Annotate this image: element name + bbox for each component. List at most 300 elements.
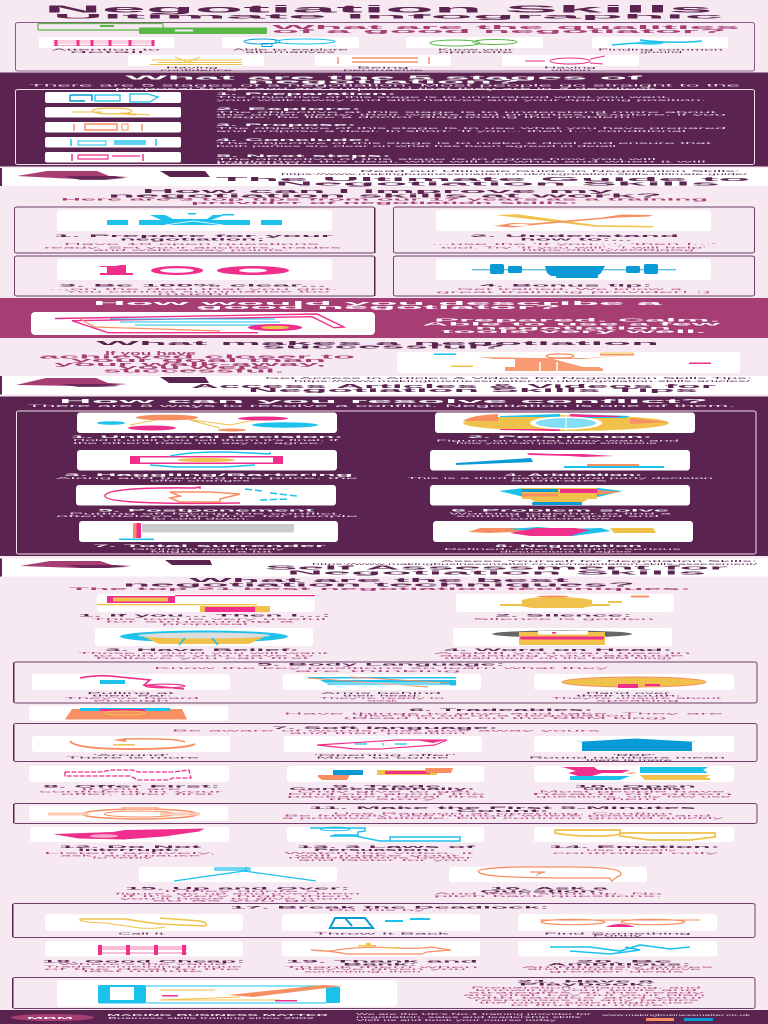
technique 13: 3 laws of persuasion: and faster for you bbox=[298, 858, 468, 862]
quality card 4: Finding common bbox=[598, 48, 723, 51]
technique 16: ask a question bbox=[434, 867, 662, 897]
text: success definition: you were bbox=[118, 365, 270, 370]
body language: arms: speak bbox=[367, 699, 398, 702]
way 1: unilateral decision bbox=[71, 412, 343, 445]
stage text 4: conclude: both parties are clear on what has been agreed in detail bbox=[216, 144, 616, 148]
quality card 4 bbox=[592, 37, 728, 54]
technique 3: have belief: Those around you will want bbox=[78, 651, 329, 655]
stage text 1: preparation: 1. Preparation: bbox=[216, 92, 396, 96]
panel: tip 3 be clear: You cannot summarise too bbox=[64, 290, 330, 293]
footer website and buttons bbox=[601, 1014, 750, 1021]
technique 9: trade concessionally: Concessionally: bbox=[289, 787, 475, 791]
technique 6: tradeables: like the oil of a negotiation bbox=[358, 714, 632, 717]
technique 2: silence: Silence is golden bbox=[473, 617, 654, 621]
panel: tip 3 be clear: much! bbox=[157, 292, 230, 296]
stage text 2: explore: 2. Explore: bbox=[216, 107, 361, 111]
stage text 5: next steps bbox=[216, 154, 706, 165]
stage text 5: next steps: happen. bbox=[216, 161, 306, 165]
banner: articles and videos bbox=[0, 376, 768, 394]
technique 10: open concessions bbox=[532, 766, 734, 801]
technique 13: 3 laws of persuasion: negotiations better bbox=[288, 856, 473, 859]
deadlock: find something funny: Find Something bbox=[544, 932, 691, 935]
body language: mouth bbox=[534, 674, 734, 702]
footer company name: MAKING BUSINESS MATTER bbox=[107, 1013, 328, 1017]
heading: how can I improve: negotiation skills at work? bbox=[108, 192, 662, 199]
technique 20: be ambitious: greater deals bbox=[549, 970, 686, 973]
stage text 2: explore bbox=[216, 107, 727, 119]
technique 12: do not interrupt: Listen actively, bbox=[44, 851, 216, 855]
text: prepared calm: negotiation bbox=[475, 325, 671, 331]
deadlock heading: 17. Break the Deadlock: bbox=[230, 905, 549, 909]
panel: tip 4 bonus: 4. Bonus tip: bbox=[480, 283, 652, 288]
icon: handshake logo bbox=[17, 171, 210, 180]
heading: best negotiation techniques: negotiation techniques? bbox=[123, 581, 635, 588]
technique 6: tradeables: Have things to give and take. They are bbox=[284, 712, 723, 715]
stage text 2: explore: stage, be like a doctor diagnosing the problem. bbox=[216, 115, 636, 119]
technique 13: 3 laws of persuasion bbox=[284, 827, 484, 862]
body language: ear: their ear: bbox=[92, 694, 172, 697]
panel: 21 have a playbook bbox=[12, 978, 755, 1008]
panel: qualities of a good negotiator bbox=[16, 22, 754, 71]
stage text 3: propose: and propose a deal. In short: 'If you... then I...' conditional bbox=[216, 129, 686, 133]
panel: tip 2 understand: ...use the 'If you...', 'then I...' bbox=[431, 242, 717, 246]
way 7: total surrender: 7. Total surrender bbox=[93, 544, 328, 548]
soft language heading bbox=[172, 726, 602, 735]
deadlock: find something funny bbox=[518, 914, 717, 937]
quality card 1: Attention to bbox=[52, 48, 160, 51]
title bbox=[44, 4, 723, 20]
panel: 5 stages of negotiation bbox=[0, 72, 768, 166]
way 8: negotiation bbox=[433, 521, 693, 553]
panel: 5 body language bbox=[13, 662, 757, 703]
technique 18: good cheap: Where's the value bbox=[59, 962, 226, 966]
technique 15: up and over: 15. Up and Over: bbox=[125, 886, 350, 890]
text: success definition: your goal than bbox=[71, 358, 326, 363]
way 1: unilateral decision: 1. Unilateral decision: bbox=[71, 435, 343, 439]
deadlock: call it: Call It bbox=[118, 932, 165, 935]
technique 14: emotion: 14. Emotion: bbox=[549, 845, 720, 849]
soft language heading: and their position bbox=[289, 731, 466, 735]
panel: tip 2 understand bbox=[394, 207, 754, 253]
first 5 minutes text bbox=[282, 806, 724, 820]
body language: mouth: They're unsure about bbox=[551, 696, 722, 700]
heading: how can I improve: provider of negotiation skills: bbox=[191, 201, 578, 205]
panel: tip 1 prepare: and walk-away points. bbox=[93, 248, 289, 252]
soft language: opening offer: 'Opening offer' bbox=[314, 753, 457, 757]
body language heading: 5. Body Language: bbox=[257, 662, 505, 667]
banner text 2: Access Articles & Videos for bbox=[191, 383, 717, 389]
panel: tip 3 be clear: ...on the deal that you got. bbox=[49, 287, 338, 291]
panel: tip 2 understand: tool. Try 'If you will', 'I will help' bbox=[441, 246, 707, 249]
technique 14: emotion: controlled only bbox=[552, 851, 720, 855]
technique 2: silence: 2. Silence: bbox=[495, 613, 632, 618]
technique 9: trade concessionally: Find out about the bbox=[287, 792, 485, 796]
icon: playbook tablet bbox=[98, 985, 343, 1004]
way 1: unilateral decision: the others have no say or agree. bbox=[73, 441, 323, 445]
first 5 minutes text: Be friendly, use humour where possible and bbox=[284, 814, 711, 817]
stage text 3: propose: The objective of this stage is to use what you have prepared bbox=[216, 126, 727, 130]
footer logo: MBM bbox=[27, 1016, 73, 1020]
heading: how can I improve: Here are 3 top tips from our 17 years as a training bbox=[61, 197, 708, 202]
heading: 5 stages: What are the 5 stages of bbox=[125, 75, 644, 81]
banner text 3: Self Assessment for bbox=[265, 564, 729, 571]
technique 18: good cheap: last minute bbox=[83, 969, 203, 973]
way 8: negotiation: discussions to agree bbox=[500, 550, 633, 553]
panel: what makes a negotiation successful: What makes a negotiation bbox=[96, 340, 659, 346]
first 5 minutes text: Count: bbox=[456, 809, 549, 813]
technique 12: do not interrupt: 12. Do Not bbox=[59, 845, 201, 849]
panel: 11 first 5 minutes bbox=[13, 804, 757, 824]
panel: tip 3 be clear bbox=[14, 256, 376, 296]
soft language: around: 'Around' bbox=[93, 753, 170, 757]
stage text 5: next steps: implement the deal, who will do what and when it will bbox=[216, 160, 706, 163]
technique 9: trade concessionally: Only give to get. bbox=[297, 790, 478, 793]
stage text 1: preparation: your walk-away and alternatives and your opening position. bbox=[216, 98, 706, 102]
technique 1: if you then I: This tool is very useful bbox=[91, 617, 326, 621]
stage text 2: explore: The objective at this stage is to understand more about bbox=[216, 110, 718, 114]
playbook text: 21. Have a bbox=[517, 979, 655, 984]
technique 8: offer first: confident in your bbox=[39, 790, 223, 793]
heading: how can I improve: How can I improve my bbox=[142, 188, 615, 194]
body language: mouth: speaking bbox=[596, 699, 679, 702]
soft language heading: Be aware of words that give away yours bbox=[172, 729, 602, 732]
banner text bbox=[216, 170, 750, 187]
technique 19: thank and bank: Bank: bbox=[343, 962, 417, 967]
technique 19: thank and bank: something, then bbox=[304, 970, 421, 973]
technique 9: trade concessionally: the story bbox=[328, 797, 438, 801]
technique 4: word on head: 4. Word on Head: bbox=[444, 648, 672, 652]
technique 19: thank and bank: Thank them when bbox=[284, 965, 478, 969]
way 2: persuasion: Figure out what they want and bbox=[436, 439, 680, 442]
deadlock: throw it back bbox=[282, 914, 480, 935]
body language: arms bbox=[283, 674, 481, 702]
way 5: postponement: to cool down. bbox=[152, 517, 250, 520]
panel: good negotiator: good negotiator? bbox=[196, 304, 561, 310]
title: Ultimate Infographic bbox=[53, 13, 723, 20]
stage text 5: next steps: 5. Next steps: bbox=[216, 154, 391, 158]
technique 10: open concessions: them bbox=[605, 797, 657, 801]
way 3: haggling: 3. Haggling/Bartering bbox=[64, 473, 353, 477]
way 1: unilateral decision: Hold it until you tell them it's final, if bbox=[73, 438, 339, 442]
footer company name bbox=[107, 1013, 328, 1020]
footer description bbox=[356, 1012, 591, 1022]
technique 3: have belief: believe you can first bbox=[96, 656, 311, 660]
stage icon: explore bbox=[45, 107, 181, 118]
technique 3: have belief bbox=[78, 628, 329, 660]
technique 15: up and over: so as you go bbox=[152, 899, 316, 902]
body language: mouth: their mouth: bbox=[576, 694, 681, 697]
panel: tip 2 understand: how to:... bbox=[520, 237, 632, 242]
soft language heading: 7. Soft language: bbox=[272, 726, 498, 730]
footer bbox=[0, 1010, 768, 1024]
technique 15: up and over: If they quote a bbox=[164, 889, 319, 893]
technique 15: up and over: if it's very high, then bbox=[122, 894, 350, 898]
banner text 3: Negotiation Skills bbox=[287, 569, 706, 576]
stage text 4: conclude bbox=[216, 138, 712, 148]
banner: ultimate guide bbox=[0, 168, 768, 187]
technique 13: 3 laws of persuasion: Watch the video, it bbox=[284, 851, 474, 855]
way 3: haggling: offer changes bbox=[150, 479, 250, 482]
technique 20: be ambitious: Ambitious: bbox=[547, 962, 691, 967]
stage icon: conclude bbox=[45, 137, 181, 148]
deadlock: throw it back: Throw It Back bbox=[314, 932, 451, 935]
technique 16: ask a question: pitch back questions. bbox=[434, 894, 662, 897]
quality card 4: ground bbox=[640, 50, 682, 54]
soft language: opening offer: More to come bbox=[316, 756, 449, 759]
body language heading: Know the key positions so learn what they bbox=[154, 666, 610, 670]
technique 13: 3 laws of persuasion: will make your bbox=[292, 854, 460, 857]
text: success definition: successful. bbox=[103, 368, 284, 374]
technique 16: ask a question: And then shut up. No bbox=[434, 892, 662, 895]
banner text: Read our Ultimate Guide to Negotiation Skills: bbox=[360, 170, 740, 173]
panel: 17 break the deadlock bbox=[12, 904, 755, 938]
panel: tip 4 bonus: Get trained. We know a bbox=[457, 287, 682, 291]
technique 19: thank and bank: they've given you bbox=[294, 967, 466, 971]
banner text: Negotiation Skills bbox=[275, 180, 720, 187]
playbook text bbox=[463, 979, 706, 1007]
soft language: around: There is more bbox=[66, 756, 199, 759]
technique 14: emotion bbox=[534, 827, 734, 855]
heading: best negotiation techniques: What are the best bbox=[189, 577, 570, 583]
footer website and buttons: www.makingbusinessmatter.co.uk bbox=[601, 1014, 750, 1017]
technique 1: if you then I bbox=[78, 594, 331, 626]
way 4: arbitration: This is a third party/neutral party decision bbox=[407, 476, 714, 480]
text: prepared calm: Prepared. Calm. bbox=[434, 317, 720, 323]
text: success definition bbox=[39, 351, 355, 374]
technique 10: open concessions: questions, only few use bbox=[536, 795, 731, 798]
stage text 1: preparation bbox=[216, 92, 706, 102]
quality card 5: confidence bbox=[160, 68, 232, 71]
soft language: RRP: Round numbers mean bbox=[529, 756, 725, 759]
technique 10: open concessions: 10. Open bbox=[574, 784, 696, 788]
first 5 minutes text: a positive attitude. Find common ground quickly bbox=[282, 816, 724, 820]
soft language: RRP bbox=[529, 736, 734, 762]
way 7: total surrender: Might feel a lot bbox=[150, 550, 274, 553]
technique 20: be ambitious bbox=[518, 941, 717, 973]
body language: ear: enough bbox=[93, 699, 169, 702]
quality card 2 bbox=[222, 37, 359, 54]
footer logo bbox=[11, 1014, 94, 1021]
technique 15: up and over bbox=[115, 867, 360, 902]
panel: 7 soft language bbox=[13, 724, 757, 762]
banner text 3 bbox=[265, 560, 759, 576]
footer description: We are the UK's No.1 training provider for bbox=[356, 1012, 591, 1016]
technique 15: up and over: figure, go up and over them bbox=[115, 892, 360, 895]
icon: handshake logo 3 bbox=[20, 560, 212, 568]
panel: tip 3 be clear: 3. Be 100% clear... bbox=[59, 283, 326, 288]
technique 10: open concessions: Concessions: bbox=[583, 787, 686, 791]
quality card 6: Being bbox=[357, 66, 409, 69]
way 5: postponement bbox=[56, 485, 359, 520]
banner text 2: Negotiation Skills Tips bbox=[248, 387, 698, 393]
technique 4: word on head: adjusting your attitude bbox=[439, 654, 684, 657]
deadlock: call it bbox=[45, 914, 243, 935]
deadlock heading bbox=[230, 905, 549, 912]
text: success definition: your walk-away, bbox=[54, 362, 326, 367]
text: success definition: If you have bbox=[105, 351, 196, 356]
playbook text: the other side might use bbox=[479, 1001, 694, 1004]
stage icon: next steps bbox=[45, 152, 181, 162]
playbook text: Preparation, Planning, and bbox=[471, 986, 701, 989]
first 5 minutes text: Use Rapport at opening, Confirm bbox=[333, 812, 673, 815]
way 8: negotiation: 8. Negotiation bbox=[495, 544, 642, 548]
quality card 3: Know your bbox=[438, 48, 513, 51]
body language: ear bbox=[32, 674, 230, 702]
technique 15: up and over: you'll have to give more bbox=[120, 897, 353, 900]
quality card 5 bbox=[128, 55, 264, 71]
way 4: arbitration: arbitrates bbox=[510, 479, 607, 482]
panel: tip 1 prepare: negotiation; bbox=[120, 237, 265, 242]
quality card 2: alternatives bbox=[245, 50, 336, 54]
stage text 4: conclude: 4. Conclude: bbox=[216, 138, 371, 142]
banner text 2: https://www.makingbusinessmatter.co.uk/negotiation-skills-articles/ bbox=[294, 380, 752, 383]
way 6: problem solve bbox=[430, 485, 690, 520]
way 4: arbitration: 4. Arbitration: bbox=[505, 473, 642, 477]
panel: what makes a negotiation successful bbox=[39, 340, 740, 374]
playbook text: strategies at the ready bbox=[468, 991, 706, 994]
quality card 7: Having bbox=[544, 66, 596, 69]
body language: arms: They're ready to bbox=[319, 696, 444, 700]
icon: orange clock bbox=[48, 807, 200, 819]
technique 8: offer first bbox=[29, 766, 229, 795]
technique 1: if you then I: for structuring a bbox=[105, 620, 294, 623]
technique 6: tradeables: 6. Tradeables: bbox=[409, 708, 593, 712]
way 2: persuasion: how you can persuade someone bbox=[456, 441, 658, 445]
icon: certificate bbox=[55, 314, 344, 333]
panel: tip 2 understand: 2. Understand bbox=[470, 234, 679, 238]
first 5 minutes text: 11. Make the First 5-Minutes bbox=[309, 806, 696, 810]
technique 18: good cheap: of the deal to the bbox=[44, 967, 240, 971]
technique 9: trade concessionally: 9. Trade bbox=[332, 784, 442, 788]
icon: handshake logo 2 bbox=[16, 377, 209, 387]
technique 8: offer first: offer, offer first bbox=[61, 792, 215, 795]
body language: arms: their head: bbox=[343, 694, 421, 697]
panel: tip 1 prepare: 1. Prepare for your bbox=[54, 234, 334, 238]
icon: green handshake bbox=[38, 24, 267, 34]
way 3: haggling: Along and trading the price, the bbox=[56, 476, 359, 479]
panel: good negotiator: How would you describe a bbox=[93, 300, 665, 306]
playbook text: to find out more. bbox=[510, 1003, 670, 1007]
icon: podium winner bbox=[434, 352, 711, 372]
text: success definition: achieved closer to bbox=[39, 354, 355, 360]
way 2: persuasion: 2. Persuasion: bbox=[468, 435, 652, 439]
quality card 3: opposite bbox=[438, 50, 513, 54]
playbook text: are vital. Lay out your plan bbox=[463, 993, 705, 997]
soft language: opening offer bbox=[284, 736, 482, 759]
panel: tip 4 bonus: great training provider! ;) bbox=[436, 290, 711, 294]
playbook text: Playbook: bbox=[519, 982, 654, 987]
icon: blue dumbbell bbox=[472, 264, 676, 278]
way 5: postponement: Putting off facing the conflict, bbox=[69, 512, 343, 515]
technique 16: ask a question: 16. Ask a bbox=[490, 886, 609, 890]
way 6: problem solve: Working together to find a bbox=[449, 512, 672, 515]
panel: good negotiator bbox=[0, 298, 768, 338]
technique 4: word on head: (Read more on the RBM blog) bbox=[444, 656, 672, 660]
heading: qualities bbox=[272, 25, 740, 34]
technique 12: do not interrupt: to reply bbox=[92, 856, 153, 859]
technique 18: good cheap: 18. Good Cheap: bbox=[42, 959, 245, 964]
banner text: https://www.makingbusinessmatter.co.uk/negotiation-skills-ultimate-guide/ bbox=[281, 173, 749, 176]
technique 9: trade concessionally: packaged deal first bbox=[287, 795, 487, 798]
technique 16: ask a question: Question: bbox=[480, 889, 605, 894]
way 7: total surrender bbox=[79, 521, 338, 553]
soft language: around bbox=[32, 736, 230, 759]
technique 6: tradeables: (Read more on the RBM blog) bbox=[343, 716, 667, 720]
way 5: postponement: 5. Postponement bbox=[98, 509, 315, 513]
deadlock: find something funny: Funny bbox=[593, 934, 643, 937]
icon: pink 100 bbox=[100, 265, 289, 275]
playbook text: knowing your tools and bbox=[475, 988, 697, 992]
way 6: problem solve: solution that is good and bbox=[456, 514, 660, 518]
quality card 2: Able to explore bbox=[233, 48, 348, 51]
quality card 7: vision bbox=[551, 68, 591, 71]
body language heading: are thinking bbox=[294, 669, 462, 673]
quality card 6: persuasive bbox=[343, 68, 423, 71]
technique 3: have belief: 3. Have Belief: bbox=[105, 648, 299, 652]
technique 9: trade concessionally bbox=[287, 766, 487, 801]
banner text 3: Assess Yourself for Negotiation Skills: bbox=[441, 560, 757, 563]
heading: 5 stages: There are 5 stages of a negotiation. Most people go straight to the bbox=[29, 84, 741, 88]
way 6: problem solve: 6. Problem solve bbox=[451, 509, 669, 513]
footer description: negotiation, sales and leadership skills bbox=[356, 1015, 581, 1019]
technique 4: word on head: A skill you can use in bbox=[434, 651, 691, 655]
stage icon: propose bbox=[45, 122, 181, 132]
technique 20: be ambitious: 20. Be bbox=[576, 959, 673, 964]
playbook text: with tactics and your bbox=[464, 996, 705, 999]
technique 4: word on head bbox=[434, 628, 691, 660]
technique 1: if you then I: proposal bbox=[162, 622, 248, 626]
way 3: haggling bbox=[56, 450, 359, 482]
heading: qualities: What are the qualities bbox=[272, 25, 740, 30]
heading: best negotiation techniques: The top 21 best negotiation techniques: bbox=[69, 587, 691, 591]
technique 13: 3 laws of persuasion: 13. 3 Laws of bbox=[297, 845, 475, 849]
quality card 1: detail bbox=[70, 50, 144, 54]
quality card 6 bbox=[315, 55, 451, 71]
technique 1: if you then I: 1. If you... Then I...: bbox=[78, 613, 331, 618]
banner text 2: Get Access to Articles & Videos for Negotiation Skills Tips: bbox=[265, 377, 752, 380]
banner text 3: https://www.makingbusinessmatter.co.uk/negotiation-skills-assessment/ bbox=[312, 563, 759, 566]
way 8: negotiation: Defined, often lengthy, serious bbox=[444, 547, 681, 551]
technique 12: do not interrupt: Interrupt: bbox=[78, 848, 180, 852]
technique 20: be ambitious: Ambitiously prices bbox=[522, 965, 715, 969]
body language: arms: Arms behind bbox=[321, 691, 441, 695]
footer company name: Business skills training since 2002 bbox=[108, 1016, 315, 1020]
way 5: postponement: often delays the time for people bbox=[56, 514, 359, 518]
technique 12: do not interrupt: ask, and pause bbox=[60, 854, 200, 857]
stage text 5: next steps: The objective of this stage is to agree how you will bbox=[216, 157, 656, 161]
technique 19: thank and bank bbox=[282, 941, 480, 973]
playbook text: responses to any tactics bbox=[474, 998, 701, 1002]
panel: resolving conflict: How can you resolve conflict? bbox=[59, 398, 708, 404]
deadlock heading: Do this by ... bbox=[328, 908, 449, 912]
way 4: arbitration bbox=[407, 450, 714, 482]
technique 10: open concessions: Most people have bbox=[539, 790, 725, 793]
technique 20: be ambitious: and targets, achieve bbox=[527, 967, 701, 971]
icon: crossed wrench tools bbox=[494, 214, 654, 228]
body language: mouth: Hand over bbox=[586, 691, 670, 695]
technique 14: emotion: Use it clearly bbox=[586, 848, 677, 852]
technique 13: 3 laws of persuasion: Persuasion: bbox=[314, 848, 436, 852]
technique 10: open concessions: heard of open bbox=[532, 792, 733, 796]
panel: tip 4 bonus bbox=[394, 256, 754, 296]
body language: ear: They've heard bbox=[64, 696, 199, 700]
quality card 3 bbox=[406, 37, 543, 54]
heading: how can I improve bbox=[61, 188, 708, 205]
soft language: RRP: 'RRP' bbox=[613, 753, 656, 757]
title: Negotiation Skills bbox=[44, 4, 713, 15]
technique 19: thank and bank: 19. Thank and bbox=[286, 959, 478, 964]
technique 12: do not interrupt bbox=[30, 827, 229, 859]
